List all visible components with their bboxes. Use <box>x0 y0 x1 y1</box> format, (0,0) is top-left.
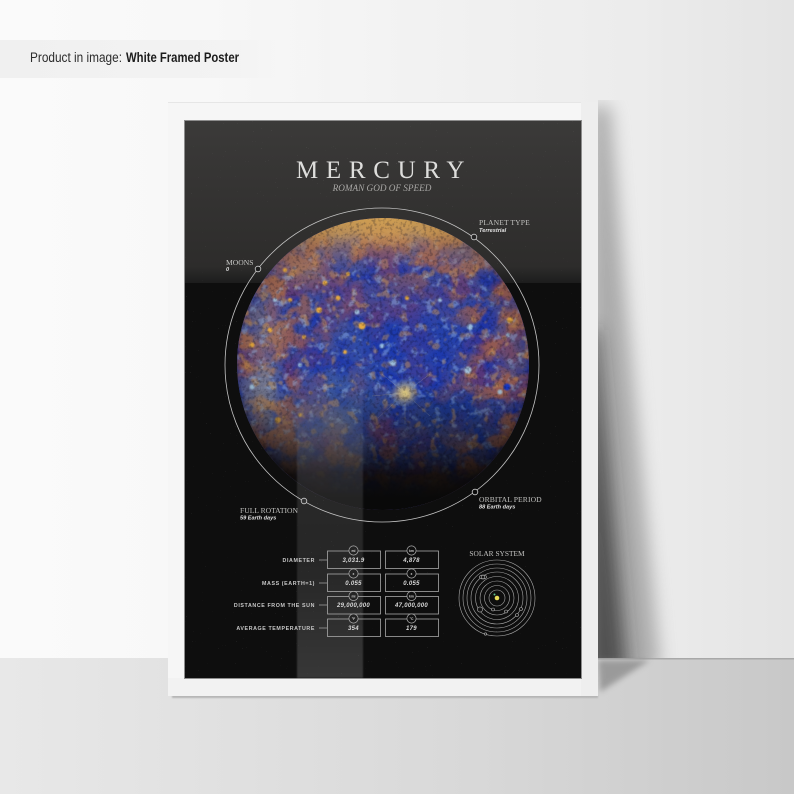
poster background <box>185 121 581 678</box>
row: mass: 0.055 <box>345 581 362 587</box>
row: diameter: km <box>409 549 414 553</box>
solar system diagram <box>459 560 535 636</box>
callout: planet type: PLANET TYPE <box>479 218 530 227</box>
planet: Mercury <box>237 218 529 510</box>
row: mass: x <box>411 572 413 576</box>
row: mass: x <box>353 572 355 576</box>
bright rayed crater <box>372 374 430 424</box>
row: diameter: 3,031.9 <box>342 558 365 564</box>
surface colour patches <box>244 246 524 450</box>
callout: orbital period: ORBITAL PERIOD <box>479 495 542 504</box>
orange spots <box>250 268 513 423</box>
row: distance from the sun: 29,000,000 <box>336 603 370 609</box>
solar system heading: SOLAR SYSTEM <box>469 549 525 558</box>
planets <box>477 575 522 635</box>
row: average temperature: °F <box>352 617 355 621</box>
title: MERCURY <box>296 157 472 184</box>
data table <box>234 546 438 636</box>
callout: orbital period: 88 Earth days <box>479 504 515 510</box>
sun <box>495 596 499 600</box>
frame shadow on wall <box>172 106 794 698</box>
callout: moons: MOONS <box>226 258 253 267</box>
node: planet type <box>471 234 477 240</box>
row: average temperature: °C <box>410 617 414 621</box>
row: distance from the sun: km <box>409 594 414 598</box>
white frame <box>168 102 598 696</box>
subtitle: ROMAN GOD OF SPEED <box>332 183 432 193</box>
row: mass <box>262 569 438 592</box>
callout: moons: 0 <box>226 267 230 273</box>
deep blue patch <box>504 384 510 390</box>
node: full rotation <box>301 498 307 504</box>
pale blue spots <box>250 298 510 394</box>
callout: full rotation: 59 Earth days <box>240 516 276 522</box>
background: floor <box>0 658 794 794</box>
row: average temperature: AVERAGE TEMPERATURE <box>236 626 315 632</box>
row: distance from the sun: mi <box>352 594 356 598</box>
banner: product caption <box>0 40 315 78</box>
grey haze <box>272 402 368 464</box>
row: distance from the sun: 47,000,000 <box>394 603 428 609</box>
row: distance from the sun <box>234 591 438 614</box>
row: mass: MASS (EARTH=1) <box>262 581 315 587</box>
row: distance from the sun: DISTANCE FROM THE SUN <box>234 603 315 609</box>
row: diameter: 4,878 <box>402 558 420 564</box>
banner: product caption: Product in image: <box>30 50 122 65</box>
row: average temperature: 179 <box>406 626 417 632</box>
glass reflection band <box>297 281 363 678</box>
callout: full rotation <box>240 506 298 522</box>
banner: product caption: White Framed Poster <box>126 50 240 65</box>
node: moons <box>255 266 261 272</box>
callout: moons <box>226 258 253 273</box>
callout: full rotation: FULL ROTATION <box>240 506 298 515</box>
callout: planet type <box>479 218 530 234</box>
node: orbital period <box>472 489 478 495</box>
poster <box>185 121 581 678</box>
row: average temperature: 354 <box>348 626 359 632</box>
row: average temperature <box>236 614 438 636</box>
orbit ring with nodes <box>225 208 539 522</box>
callout: orbital period <box>479 495 542 510</box>
row: diameter: mi <box>352 549 356 553</box>
row: diameter <box>283 546 438 568</box>
row: diameter: DIAMETER <box>283 558 315 564</box>
row: mass: 0.055 <box>403 581 420 587</box>
callout: planet type: Terrestrial <box>479 228 507 234</box>
